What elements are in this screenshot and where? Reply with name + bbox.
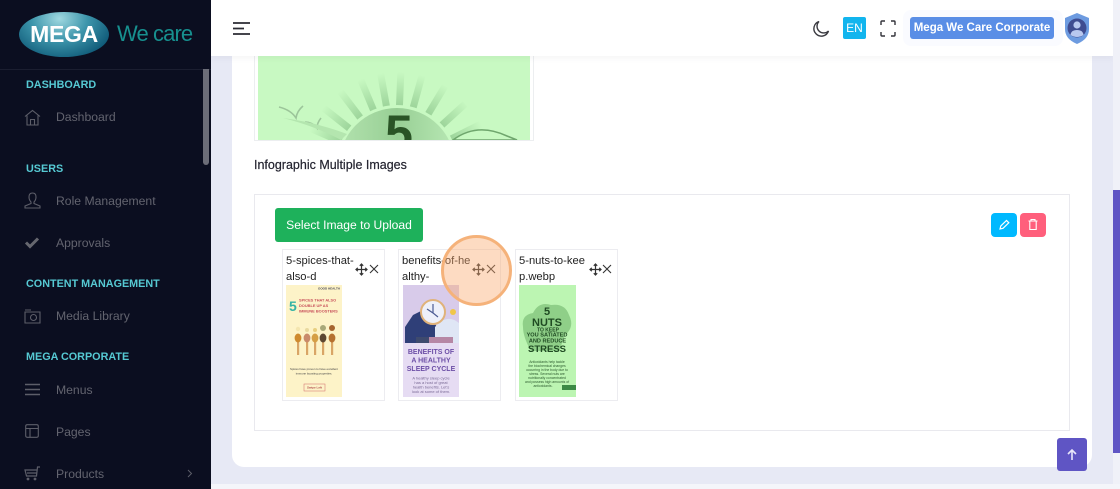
- sleep poster: BENEFITS OF: [408, 349, 455, 356]
- move icon: [472, 263, 485, 276]
- hamburger icon: [233, 22, 250, 35]
- item: Dashboard: Dashboard: [56, 110, 116, 124]
- nuts poster: STRESS: [528, 344, 566, 355]
- button: delete: [1020, 213, 1046, 237]
- move icon: [589, 263, 602, 276]
- nuts poster: [519, 285, 576, 397]
- remove icon: [370, 264, 378, 274]
- remove icon: [602, 264, 612, 274]
- item: Pages: Pages: [56, 425, 91, 439]
- sleep poster: look at some of them.: [412, 389, 450, 394]
- spices poster: DOUBLE UP AS: [299, 303, 329, 308]
- spices poster: IMMUNE BOOSTERS: [299, 308, 338, 314]
- sleep poster: A healthy sleep cycle: [412, 376, 450, 380]
- nuts poster: nutritionally concentrated: [528, 376, 566, 380]
- label: Infographic Multiple Images: Infographic Multiple Images: [254, 158, 407, 172]
- nuts poster: TO KEEP: [537, 328, 560, 334]
- filename: [402, 255, 470, 283]
- scroll-to-top button: [1057, 438, 1087, 471]
- move icon: [355, 263, 368, 276]
- user pill background: [903, 10, 1063, 46]
- filename: 5-spices-that-: [286, 255, 354, 267]
- nuts poster: YOU SATIATED: [527, 332, 567, 338]
- nuts poster: AND REDUCE: [529, 338, 566, 344]
- nuts poster: occurring in the body due to: [526, 368, 568, 372]
- filename: [519, 255, 585, 283]
- sidebar scrollbar: [203, 69, 209, 165]
- button: Select Image to Upload: Select Image to Upload: [286, 218, 412, 232]
- logo oval: [19, 12, 109, 57]
- button: edit: [991, 213, 1017, 237]
- sidebar: [0, 0, 211, 489]
- icon: menus: [25, 384, 40, 396]
- icon: check: [25, 238, 39, 248]
- top header: [211, 0, 1113, 56]
- content card: [232, 40, 1092, 467]
- upload panel: [254, 194, 1070, 431]
- sleep poster: [403, 285, 459, 397]
- section: DASHBOARD: DASHBOARD: [26, 79, 96, 91]
- chevron: [188, 470, 192, 478]
- logo oval: MEGA: [30, 21, 98, 47]
- language badge: [843, 17, 866, 39]
- moon icon: [813, 20, 830, 37]
- sleep poster: SLEEP CYCLE: [407, 366, 456, 373]
- language badge: EN: [846, 21, 863, 35]
- logo: [0, 0, 211, 70]
- item: Role Management: Role Management: [56, 194, 156, 208]
- icon: pages: [25, 424, 39, 438]
- filename: althy-: [402, 271, 429, 283]
- avatar shield: [1065, 13, 1089, 44]
- user name badge: [910, 17, 1054, 39]
- filename: also-d: [286, 271, 316, 283]
- thumbnail card: spices: [282, 249, 385, 401]
- section: CONTENT MANAGEMENT: CONTENT MANAGEMENT: [26, 278, 160, 290]
- item: Menus: Menus: [56, 383, 93, 397]
- spices poster: immune boosting properties.: [296, 372, 332, 376]
- filename: p.webp: [519, 271, 555, 283]
- spices poster: Spices have proven to have excellent: [290, 367, 338, 371]
- icon: cart: [24, 466, 40, 480]
- icon: media: [24, 310, 40, 324]
- button: Select Image to Upload: [275, 208, 423, 242]
- thumbnail card: nuts: [515, 249, 618, 401]
- page scrollbar track: [1113, 0, 1120, 484]
- preview image: [254, 56, 534, 141]
- nuts poster: NUTS: [532, 317, 562, 329]
- spices poster: GOOD HEALTH: [318, 286, 340, 290]
- click highlight circle: [441, 235, 512, 306]
- section: USERS: USERS: [26, 163, 63, 175]
- nuts poster: and possess high amounts of: [525, 380, 569, 384]
- nuts poster: Antioxidants help tackle: [529, 360, 565, 364]
- nuts poster: the biochemical changes: [528, 364, 566, 368]
- remove icon: [486, 264, 496, 274]
- thumbnail card: sleep: [398, 249, 501, 401]
- sleep poster: has a host of great: [414, 380, 448, 385]
- section: MEGA CORPORATE: MEGA CORPORATE: [26, 351, 129, 363]
- sleep poster: A HEALTHY: [411, 358, 451, 364]
- item: Approvals: Approvals: [56, 236, 110, 250]
- page background: [211, 56, 1120, 489]
- icon: home: [24, 110, 40, 126]
- nuts poster: 5: [544, 306, 550, 318]
- page scrollbar thumb: [1113, 190, 1120, 453]
- nuts poster: stress. Several nuts are: [529, 372, 565, 376]
- icon: user: [24, 192, 40, 208]
- nuts poster: antioxidants.: [533, 384, 553, 388]
- spices poster: 5: [289, 298, 297, 314]
- fullscreen icon: [880, 20, 896, 37]
- filename: benefits-of-he: [402, 255, 470, 267]
- logo wordmark: We care: [117, 21, 192, 46]
- sleep poster: health benefits. Let's: [413, 384, 449, 390]
- item: Media Library: Media Library: [56, 309, 130, 323]
- filename: [286, 255, 354, 283]
- item: Products: Products: [56, 467, 104, 481]
- bottom strip: [211, 484, 1120, 489]
- spices poster: SPICES THAT ALSO: [299, 298, 336, 302]
- spices poster: Swipe Left: [307, 386, 322, 390]
- user name badge: Mega We Care Corporate: [914, 22, 1050, 34]
- spices poster: [286, 285, 342, 397]
- filename: 5-nuts-to-kee: [519, 255, 585, 267]
